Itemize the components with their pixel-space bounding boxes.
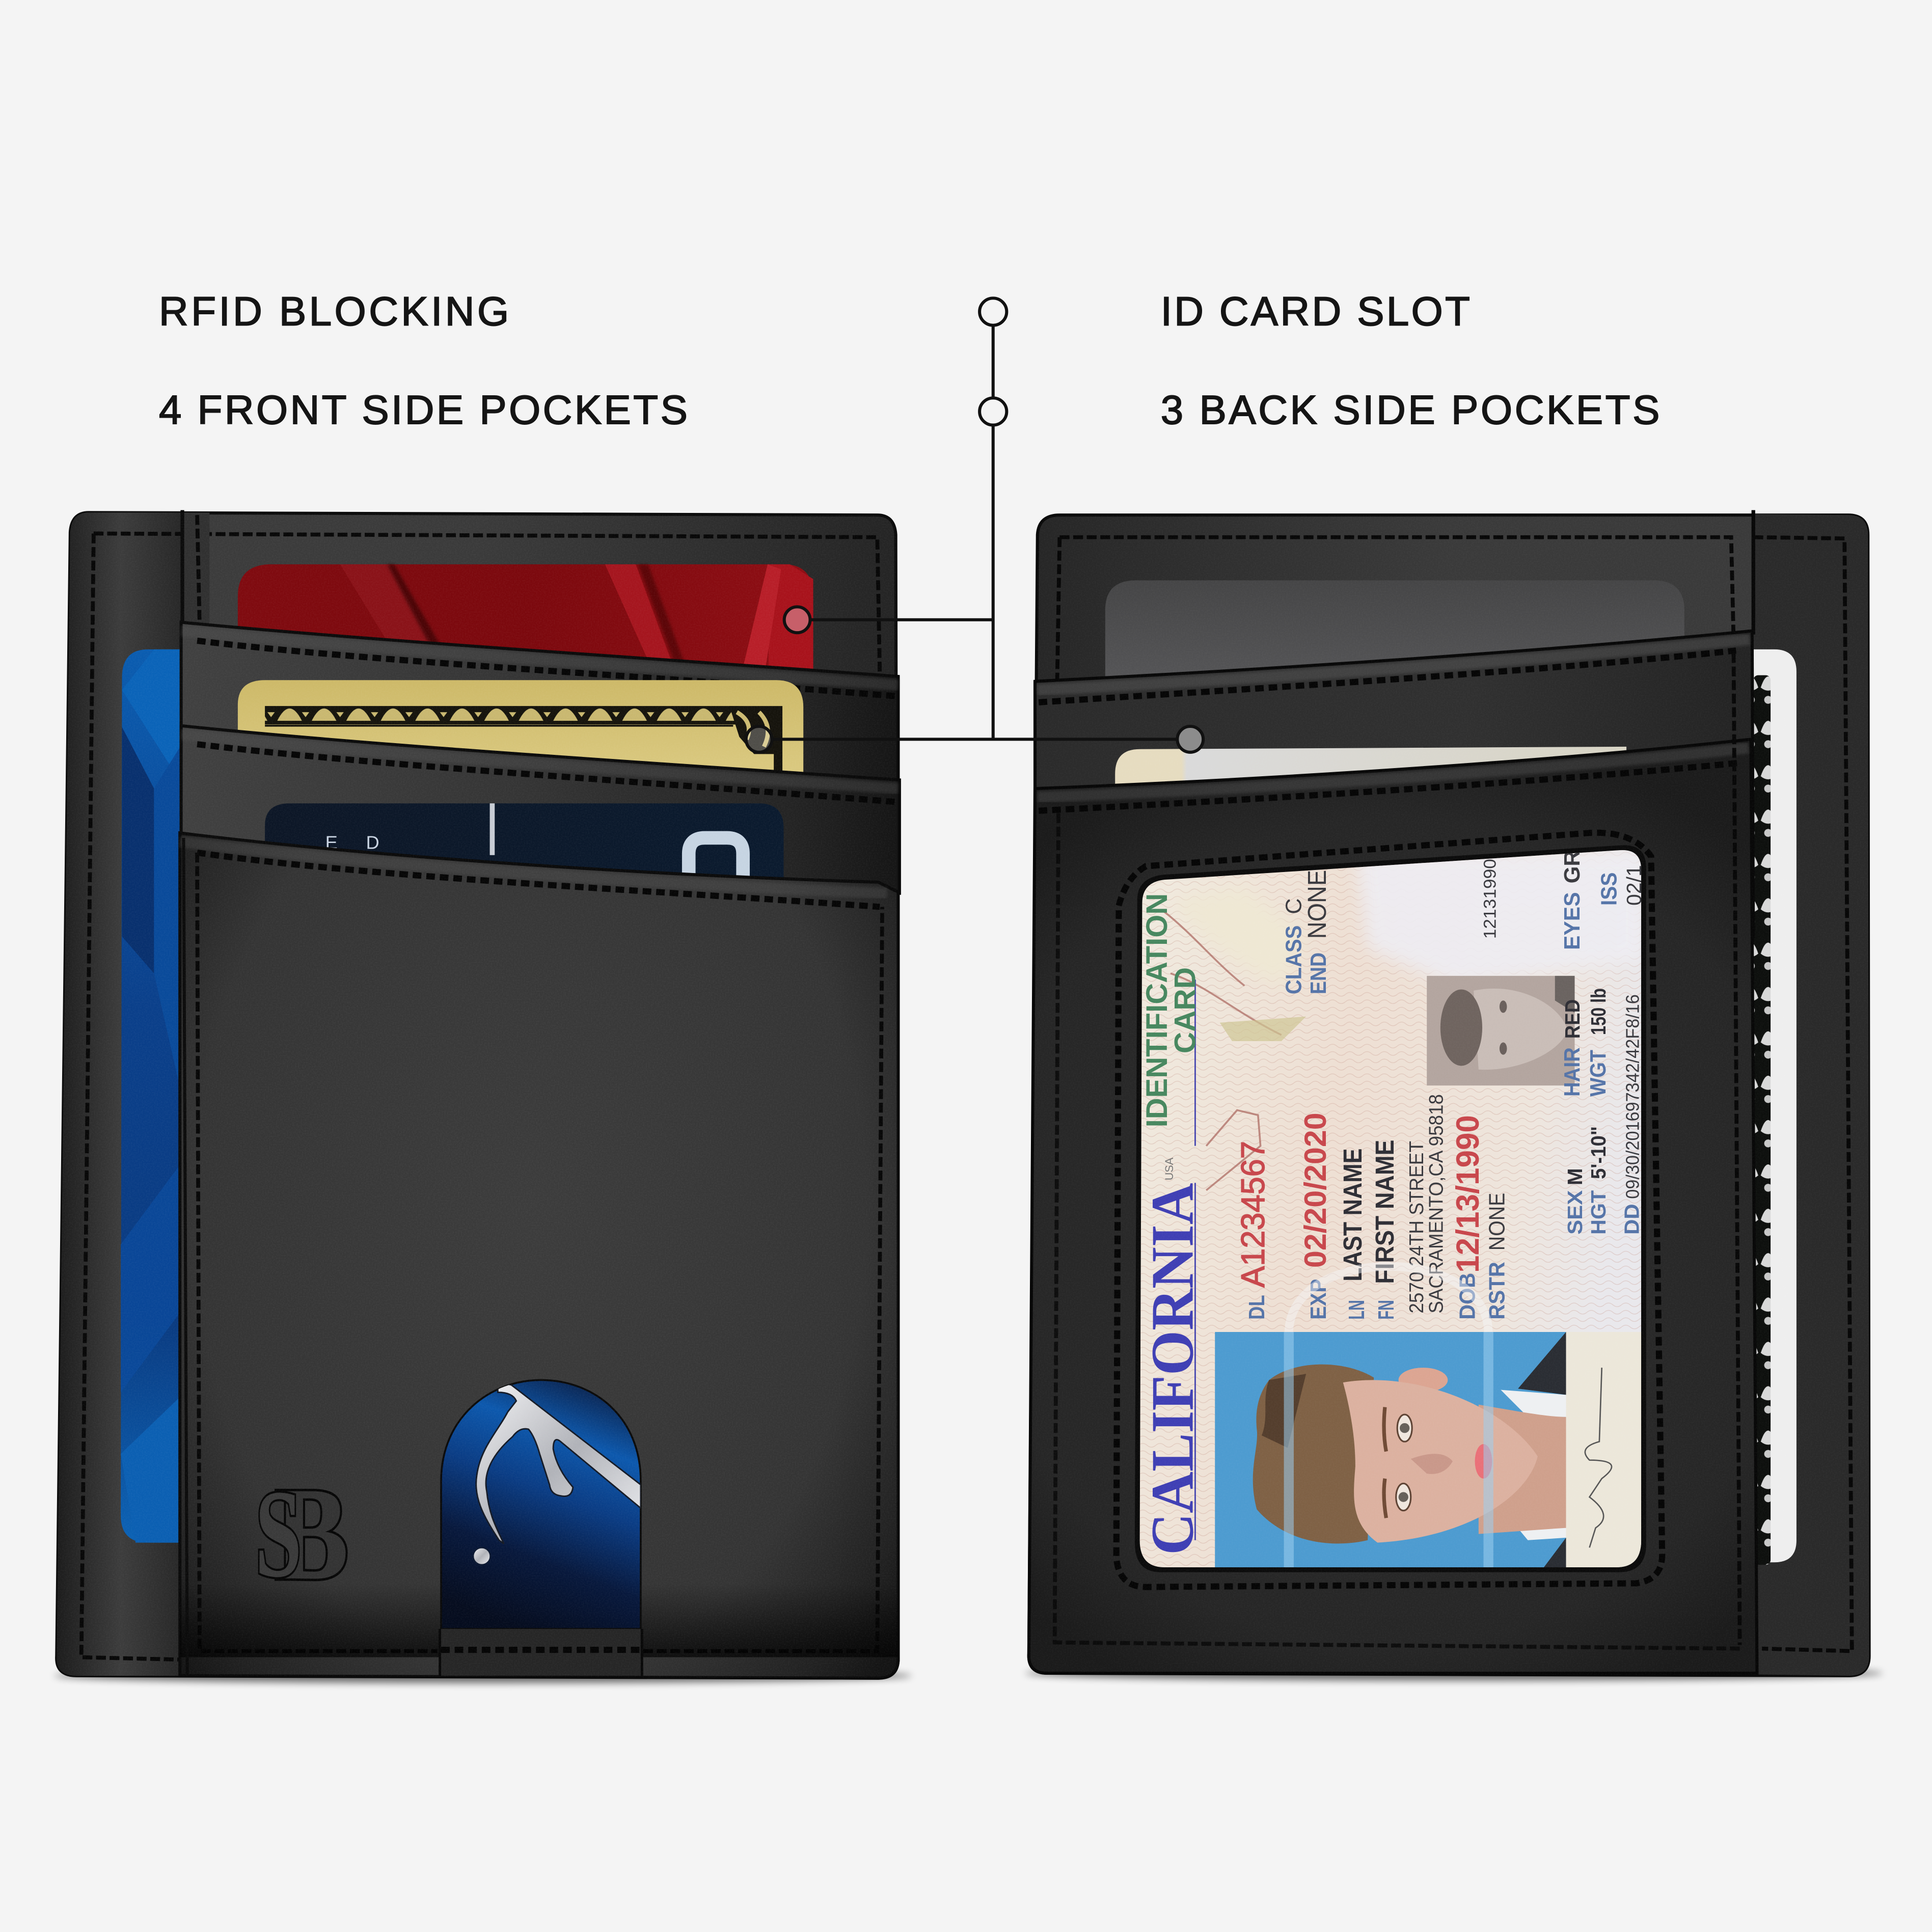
ID text: 12/13/1990 [1450, 1115, 1486, 1273]
shadow: right wallet [1025, 1666, 1883, 1681]
seam stitching [1734, 653, 1740, 1645]
ID text: EYES [1560, 892, 1585, 950]
ID text: NONE [1302, 870, 1331, 939]
ID text [1139, 834, 1646, 1555]
right strip [1753, 514, 1869, 1676]
callout lines [746, 298, 1203, 752]
ID background [1133, 838, 1651, 1577]
ID text: IDENTIFICATION [1140, 893, 1174, 1127]
shadow: left wallet [54, 1668, 912, 1683]
photo [1215, 1332, 1566, 1567]
nose and lips [1411, 1454, 1453, 1474]
window shadow [1135, 845, 1646, 1572]
left leather strip [57, 512, 185, 1676]
ID text: END [1307, 953, 1331, 994]
ID text: SACRAMENTO,CA 95818 [1426, 1094, 1448, 1314]
ID text: M [1563, 1168, 1587, 1185]
gold card [238, 680, 803, 813]
callout dot: back pocket [1177, 726, 1203, 752]
ID text: EXP [1307, 1279, 1331, 1320]
red card [238, 564, 813, 690]
seam leather column [181, 512, 209, 1676]
ID text: FN [1374, 1300, 1399, 1320]
ghost portrait [1427, 976, 1574, 1085]
wallet back layer [1029, 515, 1869, 1676]
ID text: 12131990 [1481, 859, 1500, 939]
heading: ID card slot: ID CARD SLOT [1161, 289, 1470, 334]
ID text: CLASS [1282, 926, 1306, 994]
back stitching [1057, 537, 1852, 1651]
thumb notch [441, 1380, 641, 1629]
wallet seam edge [183, 838, 187, 1676]
ID text: LN [1345, 1300, 1369, 1320]
ID card [1133, 834, 1651, 1577]
navy card: D [366, 832, 379, 853]
eyes [1397, 1414, 1412, 1441]
heading: 4 front side pockets: 4 FRONT SIDE POCKETS [159, 387, 688, 432]
ID text: HGT [1587, 1190, 1610, 1235]
callout dot: gold card [746, 726, 772, 752]
panel: left wallet (front) [49, 505, 906, 1682]
callout node: RFID blocking [979, 298, 1006, 325]
wallet back layer [57, 512, 898, 1678]
ID text: CARD [1168, 967, 1202, 1053]
navy card letters: E [325, 832, 338, 853]
pocket 1 [181, 622, 898, 893]
embossed SB logo: B [275, 1460, 349, 1608]
card pattern strip [1753, 675, 1771, 1565]
pocket 2 [181, 726, 900, 893]
ID text: FIRST NAME [1370, 1140, 1399, 1284]
heading: RFID blocking: RFID BLOCKING [159, 289, 509, 334]
ID text: 09/30/201697342/42F8/16 [1622, 994, 1643, 1199]
grey metal card [1105, 580, 1684, 690]
back layer stitching [81, 533, 880, 1659]
ID text: WGT [1586, 1050, 1611, 1097]
leather grain [49, 505, 906, 1682]
brows [1384, 1407, 1386, 1518]
ID text: 02/1 [1622, 865, 1646, 906]
navy card [265, 803, 783, 912]
suit and shirt [1518, 1332, 1566, 1567]
pocket 1 [1035, 631, 1753, 936]
pocket 2 and window panel [1029, 739, 1757, 1673]
notch bottom leather [440, 1629, 642, 1676]
ID text: SEX [1563, 1190, 1587, 1235]
ID text: USA [1163, 1157, 1176, 1180]
face [1343, 1380, 1538, 1543]
ID text: RED [1561, 999, 1584, 1039]
white card [1752, 649, 1797, 1565]
ID text: CALIFORNIA [1139, 1183, 1206, 1555]
seam stitching [197, 515, 200, 623]
window stitching [1117, 833, 1662, 1587]
ID text: NONE [1485, 1193, 1510, 1250]
hair [1253, 1365, 1374, 1543]
ID text: 5'-10" [1587, 1126, 1610, 1179]
ID text: 02/20/2020 [1298, 1112, 1332, 1268]
ID text: 150 lb [1587, 988, 1610, 1035]
gold card ornament band [265, 706, 739, 724]
ID text: DOB [1456, 1273, 1480, 1320]
thumb slot reflection on window [1289, 1266, 1488, 1567]
ID text: GRN [1560, 834, 1585, 883]
leather grain [1023, 505, 1879, 1682]
neck [1479, 1405, 1566, 1534]
ID text: LAST NAME [1338, 1149, 1367, 1282]
embossed SB logo: S [255, 1464, 302, 1603]
ID text: HAIR [1560, 1047, 1585, 1097]
seam groove [1753, 510, 1754, 635]
signature area [1566, 1332, 1643, 1568]
beige card [1115, 747, 1626, 813]
front pocket [180, 833, 898, 1678]
seam groove [182, 510, 183, 629]
navy card logo [689, 838, 743, 881]
ID text: DL [1245, 1295, 1269, 1320]
ID text: RSTR [1485, 1262, 1510, 1320]
heading: 3 back side pockets: 3 BACK SIDE POCKETS [1161, 387, 1659, 432]
ID text: DD [1620, 1204, 1643, 1235]
silver hook emblem [473, 1384, 641, 1565]
blue card [121, 649, 185, 1543]
ID text: 2570 24TH STREET [1406, 1141, 1428, 1314]
panel: right wallet (back) [1023, 505, 1879, 1682]
infographic: wallet front and back [53, 296, 1884, 1689]
ID text: ISS [1597, 873, 1622, 906]
callout dot: red card [784, 607, 810, 633]
ear [1399, 1368, 1448, 1392]
ID text: C [1282, 898, 1306, 914]
callout node: ID card slot [979, 398, 1006, 425]
ID text: A1234567 [1234, 1141, 1271, 1288]
